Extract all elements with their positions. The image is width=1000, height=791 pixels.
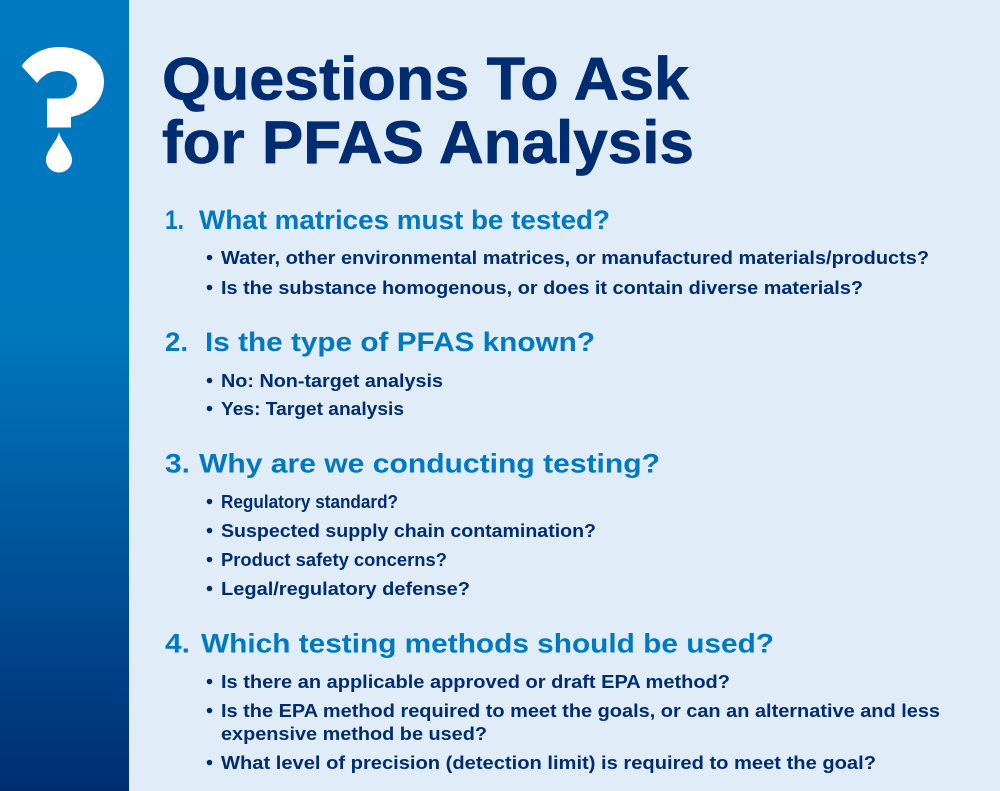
icon: question mark with water drop [22,47,104,172]
heading: question 4: Which testing methods should be used? [201,628,774,658]
sidebar panel [0,0,129,791]
bullet list: question 2: No: Non-target analysis [221,370,443,391]
bullet list: question 2: Yes: Target analysis [221,398,404,419]
heading: question 2: Is the type of PFAS known? [205,327,595,357]
heading: question 2: 2. [165,327,188,357]
bullet list: question 3: Suspected supply chain contamination? [221,520,596,541]
bullet list: question 4: Is the EPA method required to meet the goals, or can an alternative and less [221,700,940,721]
section 1: matrices [165,205,929,298]
title: for PFAS Analysis [162,109,694,176]
bullet list: question 4: What level of precision (detection limit) is required to meet the goal? [221,752,876,773]
heading: question 3: 3. [165,448,190,478]
bullet list: question 1: Water, other environmental matrices, or manufactured materials/products? [221,247,929,268]
bullet list: question 4: Is there an applicable approved or draft EPA method? [221,671,730,692]
section 2: PFAS type [165,327,595,419]
heading: question 4: 4. [165,628,190,658]
title: Questions To Ask [162,46,690,112]
bullet list: question 3: Regulatory standard? [221,491,398,512]
section 3: reason for testing [165,448,660,599]
bullet list: question 3: Product safety concerns? [221,549,447,570]
bullet list: question 3 [207,491,596,599]
bullet list: question 4 [207,671,940,773]
heading: question 1: What matrices must be tested? [199,205,610,235]
bullet list: question 4: expensive method be used? [221,723,487,744]
bullet list: question 1 [207,247,929,298]
heading: question 1: 1. [165,205,184,235]
bullet list: question 1: Is the substance homogenous, or does it contain diverse materials? [221,277,863,298]
heading: question 3: Why are we conducting testing? [199,448,660,478]
bullet list: question 3: Legal/regulatory defense? [221,578,470,599]
title [162,46,694,176]
bullet list: question 2 [207,370,443,419]
section 4: testing methods [165,628,940,773]
